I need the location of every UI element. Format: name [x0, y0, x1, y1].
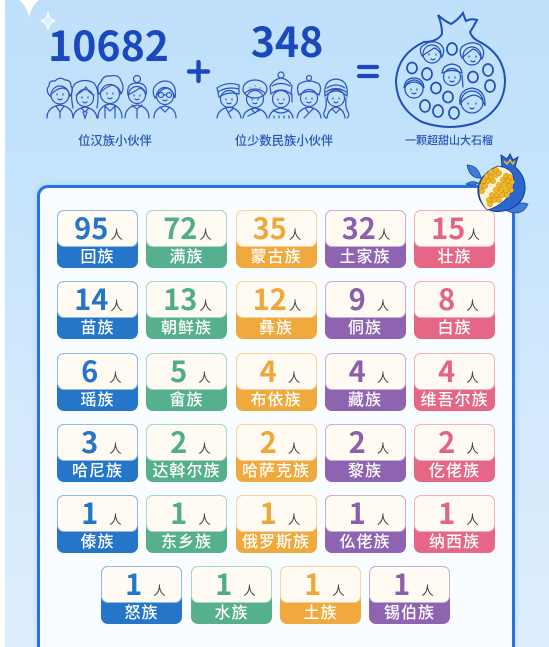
card: 苗族: 苗族: [80, 314, 114, 338]
plus sign: [187, 60, 210, 84]
icon: pomegranate with faces: [395, 11, 506, 128]
card: 水族: [191, 566, 272, 624]
equals sign: [356, 64, 380, 78]
number: 348: 348: [251, 9, 323, 69]
person 5: [153, 81, 176, 118]
card: 蒙古族: [236, 210, 316, 268]
card: 畲族: 畲族: [169, 386, 204, 410]
card: 维吾尔族: 维吾尔族: [420, 386, 488, 410]
person 4: [297, 76, 321, 118]
card: 仫佬族: 仫佬族: [339, 528, 390, 552]
card: 锡伯族: 锡伯族: [384, 599, 435, 623]
icon: opened pomegranate: [465, 153, 528, 214]
card: 俄罗斯族: [236, 495, 316, 553]
card: 俄罗斯族: 俄罗斯族: [242, 528, 310, 552]
card: 白族: 白族: [437, 314, 472, 338]
card: 哈尼族: [57, 424, 138, 482]
rind and crown: [478, 154, 525, 212]
card: 哈萨克族: [236, 424, 316, 482]
card: 土族: 土族: [303, 599, 338, 623]
card: 彝族: [236, 281, 316, 339]
card: 仡佬族: 仡佬族: [429, 457, 480, 481]
panel: ethnic group counts: [37, 185, 515, 647]
card: 布依族: [236, 352, 316, 410]
card: 瑶族: [57, 352, 138, 410]
card: 满族: 满族: [169, 243, 204, 267]
caption: pomegranate: 一颗超甜山大石榴: [405, 132, 493, 148]
card: 纳西族: 纳西族: [429, 528, 480, 552]
person 4: [125, 76, 149, 118]
card: 苗族: [57, 281, 138, 339]
card: 土家族: 土家族: [339, 243, 390, 267]
person 3: [98, 76, 123, 118]
card: 维吾尔族: [414, 352, 495, 410]
person 3: [269, 72, 293, 118]
card: 傣族: 傣族: [80, 528, 114, 552]
icon: five Han friends: [46, 74, 177, 120]
card: 仫佬族: [324, 495, 406, 553]
icon: five minority friends: [216, 71, 350, 119]
card: 藏族: [324, 352, 406, 410]
person 1: [47, 78, 73, 118]
face 4: [404, 78, 424, 98]
fruit outline: [396, 13, 505, 127]
person 2: [243, 80, 267, 118]
card: 土族: [280, 566, 361, 624]
card: 白族: [414, 281, 495, 339]
person 2: [72, 80, 98, 118]
card: 傣族: [57, 495, 138, 553]
card: 朝鲜族: [146, 281, 227, 339]
card: 纳西族: [414, 495, 495, 553]
card: 畲族: [146, 352, 227, 410]
card: 怒族: [101, 566, 182, 624]
card: 满族: [146, 210, 227, 268]
card: 壮族: [414, 210, 495, 268]
card: 水族: 水族: [214, 599, 248, 623]
face 5: [460, 88, 485, 113]
card: 达斡尔族: 达斡尔族: [152, 457, 220, 481]
face 1: [420, 42, 444, 63]
card: 瑶族: 瑶族: [80, 386, 114, 410]
card: 达斡尔族: [146, 424, 227, 482]
face 3: [442, 64, 463, 87]
card: 东乡族: 东乡族: [161, 528, 212, 552]
fruit interior: [479, 166, 514, 210]
card: 锡伯族: [369, 566, 450, 624]
card: 藏族: 藏族: [348, 386, 382, 410]
card: 侗族: 侗族: [348, 314, 382, 338]
card: 回族: 回族: [80, 243, 114, 267]
sparkle decorations: [19, 0, 56, 30]
card: 壮族: 壮族: [437, 243, 472, 267]
card: 朝鲜族: 朝鲜族: [161, 314, 212, 338]
caption: minority friends: 位少数民族小伙伴: [235, 131, 333, 149]
person 5: [324, 79, 349, 118]
person 1: [217, 84, 241, 118]
card: 彝族: 彝族: [259, 314, 293, 338]
card: 黎族: [324, 424, 406, 482]
card: 土家族: [324, 210, 406, 268]
card: 哈尼族: 哈尼族: [72, 457, 123, 481]
seeds: [479, 167, 515, 207]
seeds: [407, 43, 495, 119]
card: 黎族: 黎族: [348, 457, 382, 481]
card: 怒族: 怒族: [124, 599, 158, 623]
card: 仡佬族: [414, 424, 495, 482]
card: 布依族: 布依族: [250, 386, 302, 410]
card: 哈萨克族: 哈萨克族: [242, 457, 310, 481]
card: 蒙古族: 蒙古族: [250, 243, 302, 267]
face 2: [460, 43, 484, 65]
card: 东乡族: [146, 495, 227, 553]
number: 10682: 10682: [48, 13, 169, 73]
leaves: [466, 165, 528, 213]
card: 侗族: [324, 281, 406, 339]
caption: Han friends: 位汉族小伙伴: [78, 131, 152, 149]
card: 回族: [57, 210, 138, 268]
